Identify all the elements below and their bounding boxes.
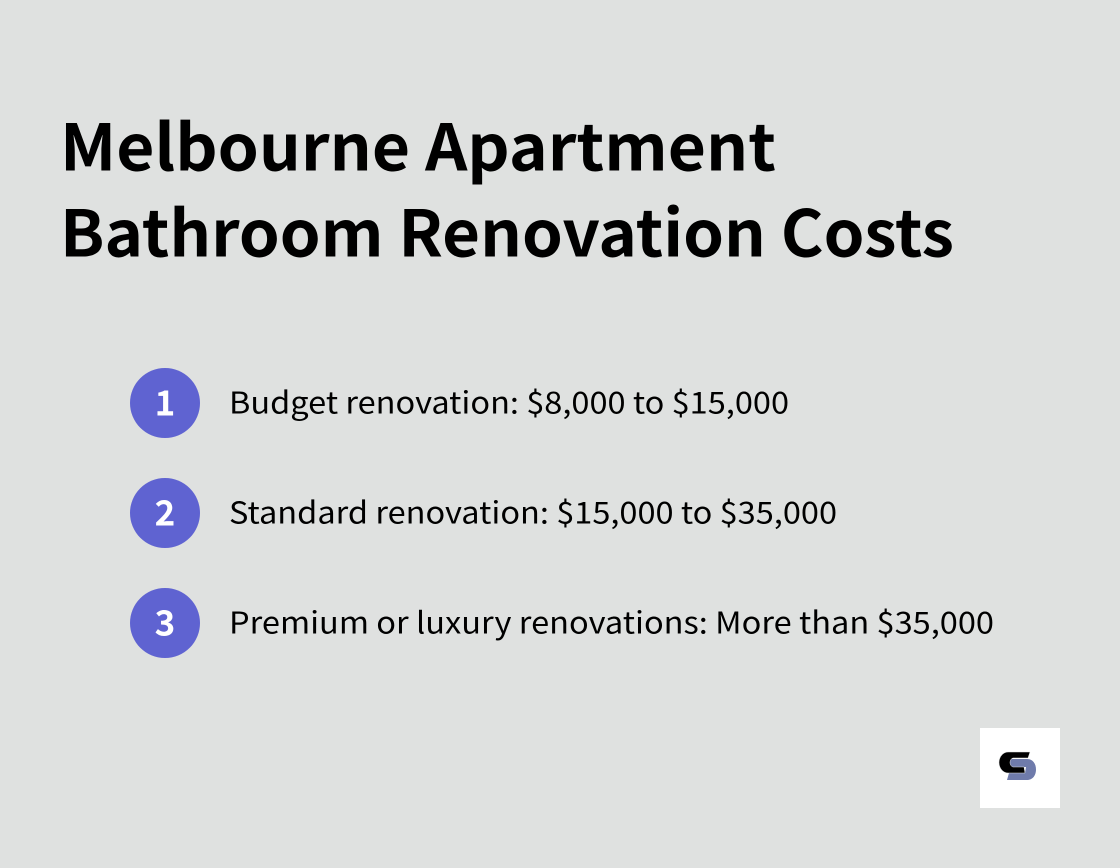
logo mark: lower blue shape <box>1007 759 1036 780</box>
number badge 2: 2 <box>155 486 175 536</box>
list item 1 <box>130 368 789 438</box>
number badge 3 <box>130 588 200 658</box>
number badge 3: 3 <box>155 596 175 646</box>
title: Melbourne Apartment <box>60 98 776 190</box>
list item 3 <box>130 588 994 658</box>
list item 2 <box>130 478 837 548</box>
logo badge <box>980 728 1060 808</box>
number badge 1: 1 <box>155 376 175 426</box>
number badge 1 <box>130 368 200 438</box>
title: Bathroom Renovation Costs <box>60 184 954 276</box>
item text 2: Standard renovation: $15,000 to $35,000 <box>229 488 837 532</box>
number badge 2 <box>130 478 200 548</box>
logo mark: upper black shape <box>999 752 1030 773</box>
item text 1: Budget renovation: $8,000 to $15,000 <box>229 378 789 422</box>
item text 3: Premium or luxury renovations: More than $35,000 <box>229 598 994 642</box>
title <box>60 98 954 276</box>
